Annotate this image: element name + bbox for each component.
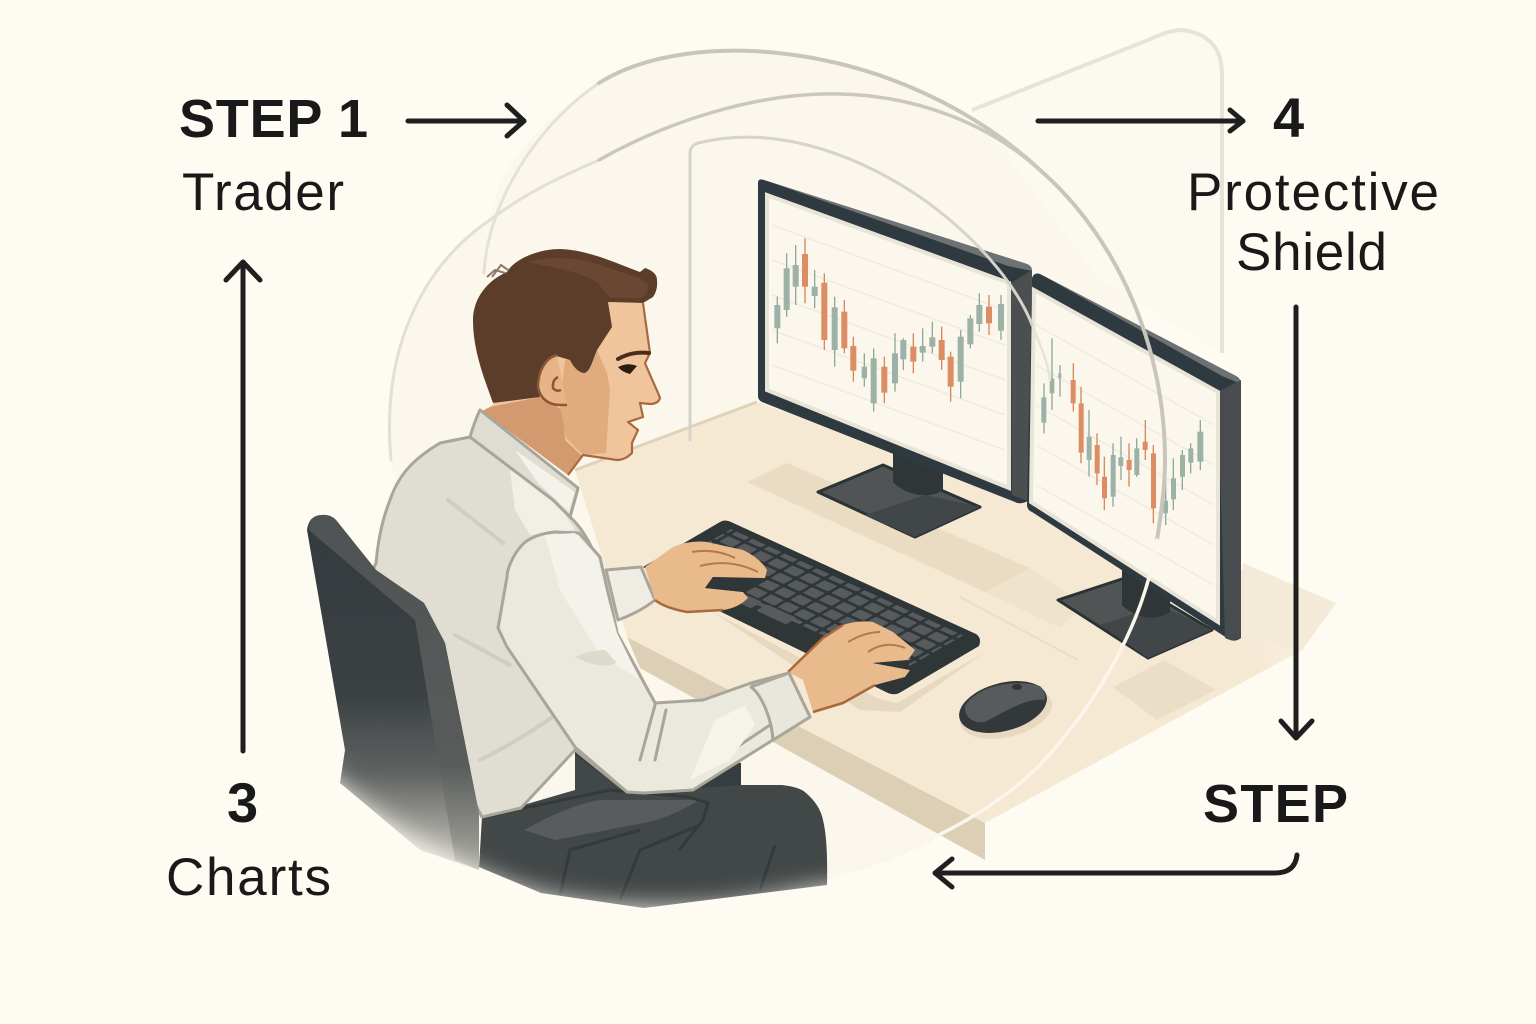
neck and face [482,302,660,475]
step 1 label [179,89,368,222]
charts label: Charts [166,848,331,907]
torso folds [448,500,575,760]
step 3 label [166,771,331,907]
outer arc top [599,51,1165,540]
forearm folds [640,683,773,760]
torso highlight [510,470,575,535]
ear [538,355,567,405]
under arm shadow [575,750,741,793]
monitor 2 stand [1058,565,1212,658]
monitor 2 [1027,274,1241,658]
outer arc left [484,83,599,273]
mouse [953,672,1057,748]
arrow: step to bottom left [935,855,1297,887]
monitor 1 grid [772,225,1005,450]
outer arc lower [820,540,1157,880]
rear right shield panel [972,30,1222,353]
monitor 1 frame [758,179,1032,503]
step label: STEP [1203,774,1348,834]
glass shield tint [389,51,1165,880]
hair tufts [487,265,508,277]
protective shield label [1187,163,1439,282]
trousers [479,750,827,908]
trader label: Trader [182,163,344,222]
trouser folds [482,790,775,900]
desk [575,402,1336,860]
arrow: down to step [1281,307,1312,738]
step 3 label: 3 [227,771,258,834]
brow [618,353,649,359]
middle arc top [599,94,1040,170]
arm highlights [545,533,640,680]
trader [307,249,915,908]
middle arc left [389,160,599,460]
mouse body [953,672,1053,742]
desk edge [627,637,985,860]
keyboard shadow [713,612,985,712]
inner arc [690,137,1033,440]
far hand [645,542,767,612]
protective shield label: Protective [1187,163,1439,222]
chair rim [309,515,479,870]
arm [498,532,810,793]
near hand [788,621,915,712]
desk shadows [747,463,1030,592]
hair highlight [527,258,648,298]
monitor 1 stand [818,452,980,537]
face profile [568,303,660,475]
near cuff [751,673,810,740]
monitor 2 screen [1031,290,1218,622]
torso [360,437,700,817]
inner arc fade [1033,327,1050,380]
arrow: to step 4 [1038,110,1243,131]
collar [470,410,578,517]
fade to background [270,720,900,1024]
step 4 label: 4 [1273,86,1304,149]
keyboard keys [663,529,963,674]
protective shield label: Shield [1236,223,1387,282]
arrow: step 1 to shield [408,105,524,136]
monitor 2 frame [1027,274,1241,641]
eye [618,364,637,374]
step 1 label: STEP 1 [179,89,368,149]
mouse shadow [955,678,1057,748]
monitor 1 screen [767,195,1009,488]
thigh highlight [524,800,699,840]
protective shield arcs [389,51,1165,880]
cheek shading [560,350,610,455]
monitor 1 [758,179,1032,537]
monitor 1 candlesticks [774,238,1004,412]
monitor 2 candlesticks [1041,338,1203,525]
keyboard [643,520,985,712]
neck shading [482,397,583,475]
far sleeve cuff [606,567,655,620]
collar highlight [515,450,575,512]
monitor 2 grid [1036,325,1214,585]
hair [473,249,657,403]
keyboard body [643,520,980,694]
arrow: up to step 1 [226,262,260,751]
chair [307,515,479,870]
desk top [575,402,1336,823]
step 4 label [1187,86,1439,282]
rear right shield outline [972,30,1222,353]
